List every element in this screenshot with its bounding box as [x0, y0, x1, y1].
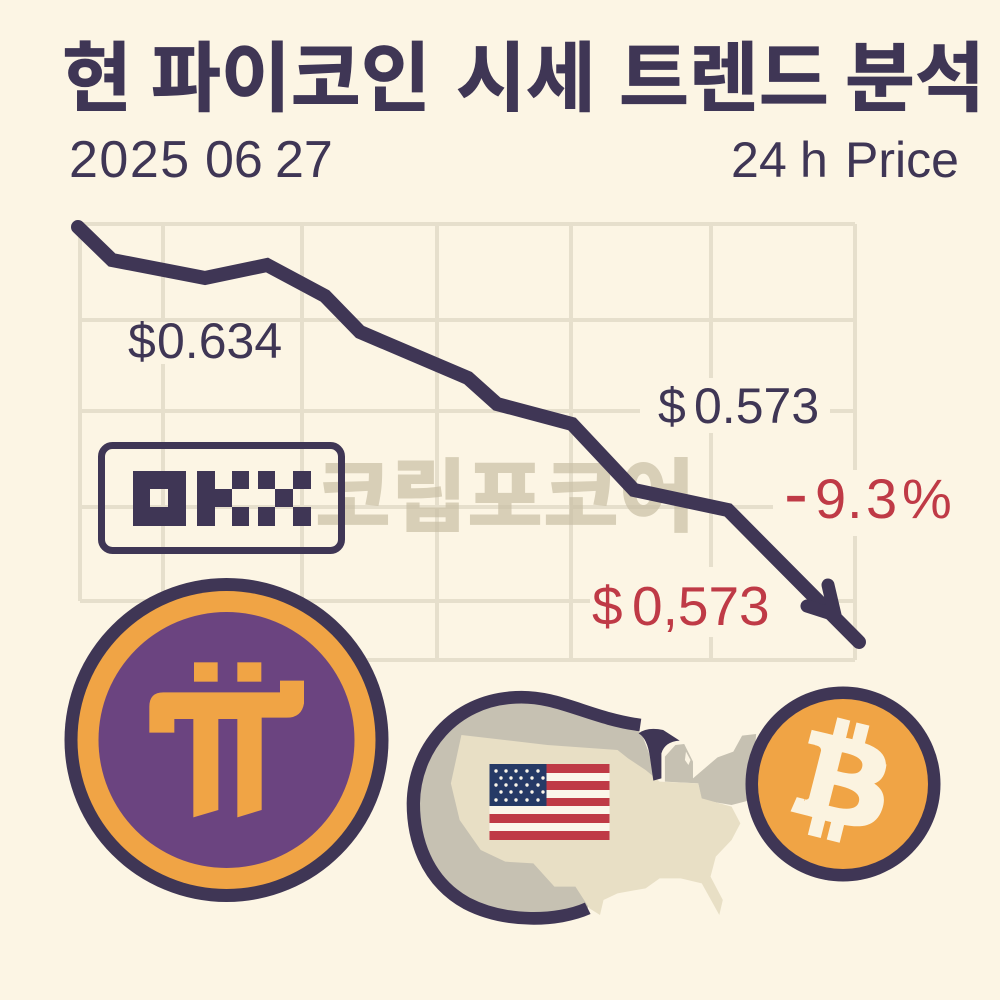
label: percent change: -	[784, 454, 808, 534]
date: 2025	[69, 131, 191, 189]
chart grid	[80, 224, 963, 660]
24h price label: 24h Price	[731, 132, 959, 188]
map outline	[413, 697, 640, 918]
icon: Pi coin	[64, 578, 388, 902]
lake outline	[639, 729, 680, 781]
title: 트렌드	[619, 37, 829, 122]
label: percent change: %	[902, 467, 952, 530]
price line with arrow	[78, 227, 859, 642]
label: percent change: 9	[815, 467, 846, 530]
icon: Bitcoin coin	[746, 686, 940, 882]
Great Lakes region	[665, 734, 756, 805]
date: 06	[205, 131, 263, 189]
label: percent change: .	[847, 467, 863, 530]
title: 시세	[456, 37, 596, 122]
map backdrop	[413, 698, 654, 917]
title: 파이코인	[151, 37, 431, 122]
icon: OKX logo	[102, 446, 342, 550]
date: 27	[275, 131, 333, 189]
label: percent change: 3	[866, 467, 897, 530]
title: 분석	[845, 37, 985, 122]
title: 현	[62, 37, 132, 122]
label: start price: $0.634	[128, 313, 282, 369]
label: end price: $0,573	[592, 575, 770, 637]
label: current price: $0.573	[658, 378, 819, 434]
icon: US flag	[490, 764, 610, 840]
icon: USA map with flag	[413, 697, 756, 918]
watermark: 코립포코어	[315, 453, 695, 542]
map of the United States	[451, 735, 740, 915]
